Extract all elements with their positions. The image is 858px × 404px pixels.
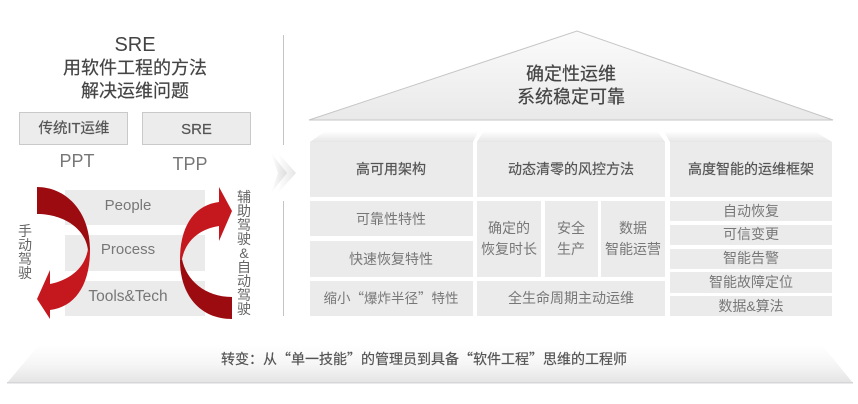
box: traditional IT ops: 传统IT运维 (39, 120, 109, 137)
box: SRE: SRE (181, 121, 212, 138)
pillar header: intelligent framework: 高度智能的运维框架 (688, 161, 814, 177)
heading: SRE method: 解决运维问题 (81, 81, 189, 101)
cell: reliability (310, 201, 473, 236)
cell: safe production (545, 201, 598, 277)
cell: fault location (670, 272, 832, 293)
vertical divider (283, 35, 284, 316)
base banner: transformation: 转变：从“单一技能”的管理员到具备“软件工程”思维的工程师 (221, 349, 627, 369)
heading: SRE method: 用软件工程的方法 (63, 58, 207, 78)
box: SRE (142, 112, 250, 144)
cell: data ops: 智能运营 (605, 241, 661, 257)
cell: reliability: 可靠性特性 (356, 211, 426, 227)
cell: blast radius: 缩小“爆炸半径”特性 (324, 287, 458, 307)
cell: recovery time (477, 201, 541, 277)
cell: fault location: 智能故障定位 (709, 274, 793, 290)
pillar header: risk control: 动态清零的风控方法 (508, 161, 634, 177)
cell: fast recovery: 快速恢复特性 (349, 251, 433, 267)
roof: deterministic ops: 系统稳定可靠 (517, 87, 625, 107)
label: TPP: TPP (172, 154, 208, 174)
cell: trusted change (670, 225, 832, 245)
block: Tools&Tech: Tools&Tech (88, 288, 168, 305)
block: Tools&Tech (65, 281, 205, 316)
pillar header: high availability (310, 142, 473, 197)
cell: smart alert (670, 249, 832, 269)
cell: recovery time: 恢复时长 (481, 241, 537, 257)
block: Process (65, 235, 205, 271)
cell: blast radius (310, 281, 473, 316)
label: assisted and automatic driving: 辅助驾驶&自动驾驶 (237, 189, 251, 317)
cell: full lifecycle: 全生命周期主动运维 (508, 290, 634, 306)
cell: auto recovery (670, 201, 832, 221)
block: People: People (105, 197, 151, 214)
arrow: manual driving (37, 187, 90, 319)
base banner: transformation (7, 345, 853, 384)
block: Process: Process (101, 241, 155, 258)
pillar header: risk control (477, 142, 665, 197)
heading: SRE method: SRE (114, 34, 156, 56)
roof: deterministic ops (309, 31, 833, 120)
icon: chevrons (271, 153, 296, 193)
box: traditional IT ops (20, 112, 128, 144)
cell: smart alert: 智能告警 (723, 250, 779, 266)
arrow: assisted and automatic driving (180, 187, 232, 319)
roof: deterministic ops: 确定性运维 (526, 64, 616, 84)
pillar header: intelligent framework (670, 142, 832, 197)
cell: data and algorithm (670, 296, 832, 316)
cell: data ops: 数据 (619, 220, 647, 236)
cell: recovery time: 确定的 (488, 220, 530, 236)
cell: data ops (601, 201, 665, 277)
cell: fast recovery (310, 241, 473, 277)
block: People (65, 190, 205, 225)
label: PPT: PPT (59, 151, 95, 171)
cell: safe production: 生产 (557, 241, 585, 257)
heading: SRE method (63, 34, 207, 101)
pillar caps (310, 132, 832, 142)
cell: trusted change: 可信变更 (723, 226, 779, 242)
pillar header: high availability: 高可用架构 (356, 161, 426, 177)
cell: data and algorithm: 数据&算法 (718, 298, 784, 314)
cell: full lifecycle (477, 281, 665, 316)
label: manual driving: 手动驾驶 (18, 223, 32, 281)
cell: safe production: 安全 (557, 220, 585, 236)
cell: auto recovery: 自动恢复 (723, 203, 779, 219)
